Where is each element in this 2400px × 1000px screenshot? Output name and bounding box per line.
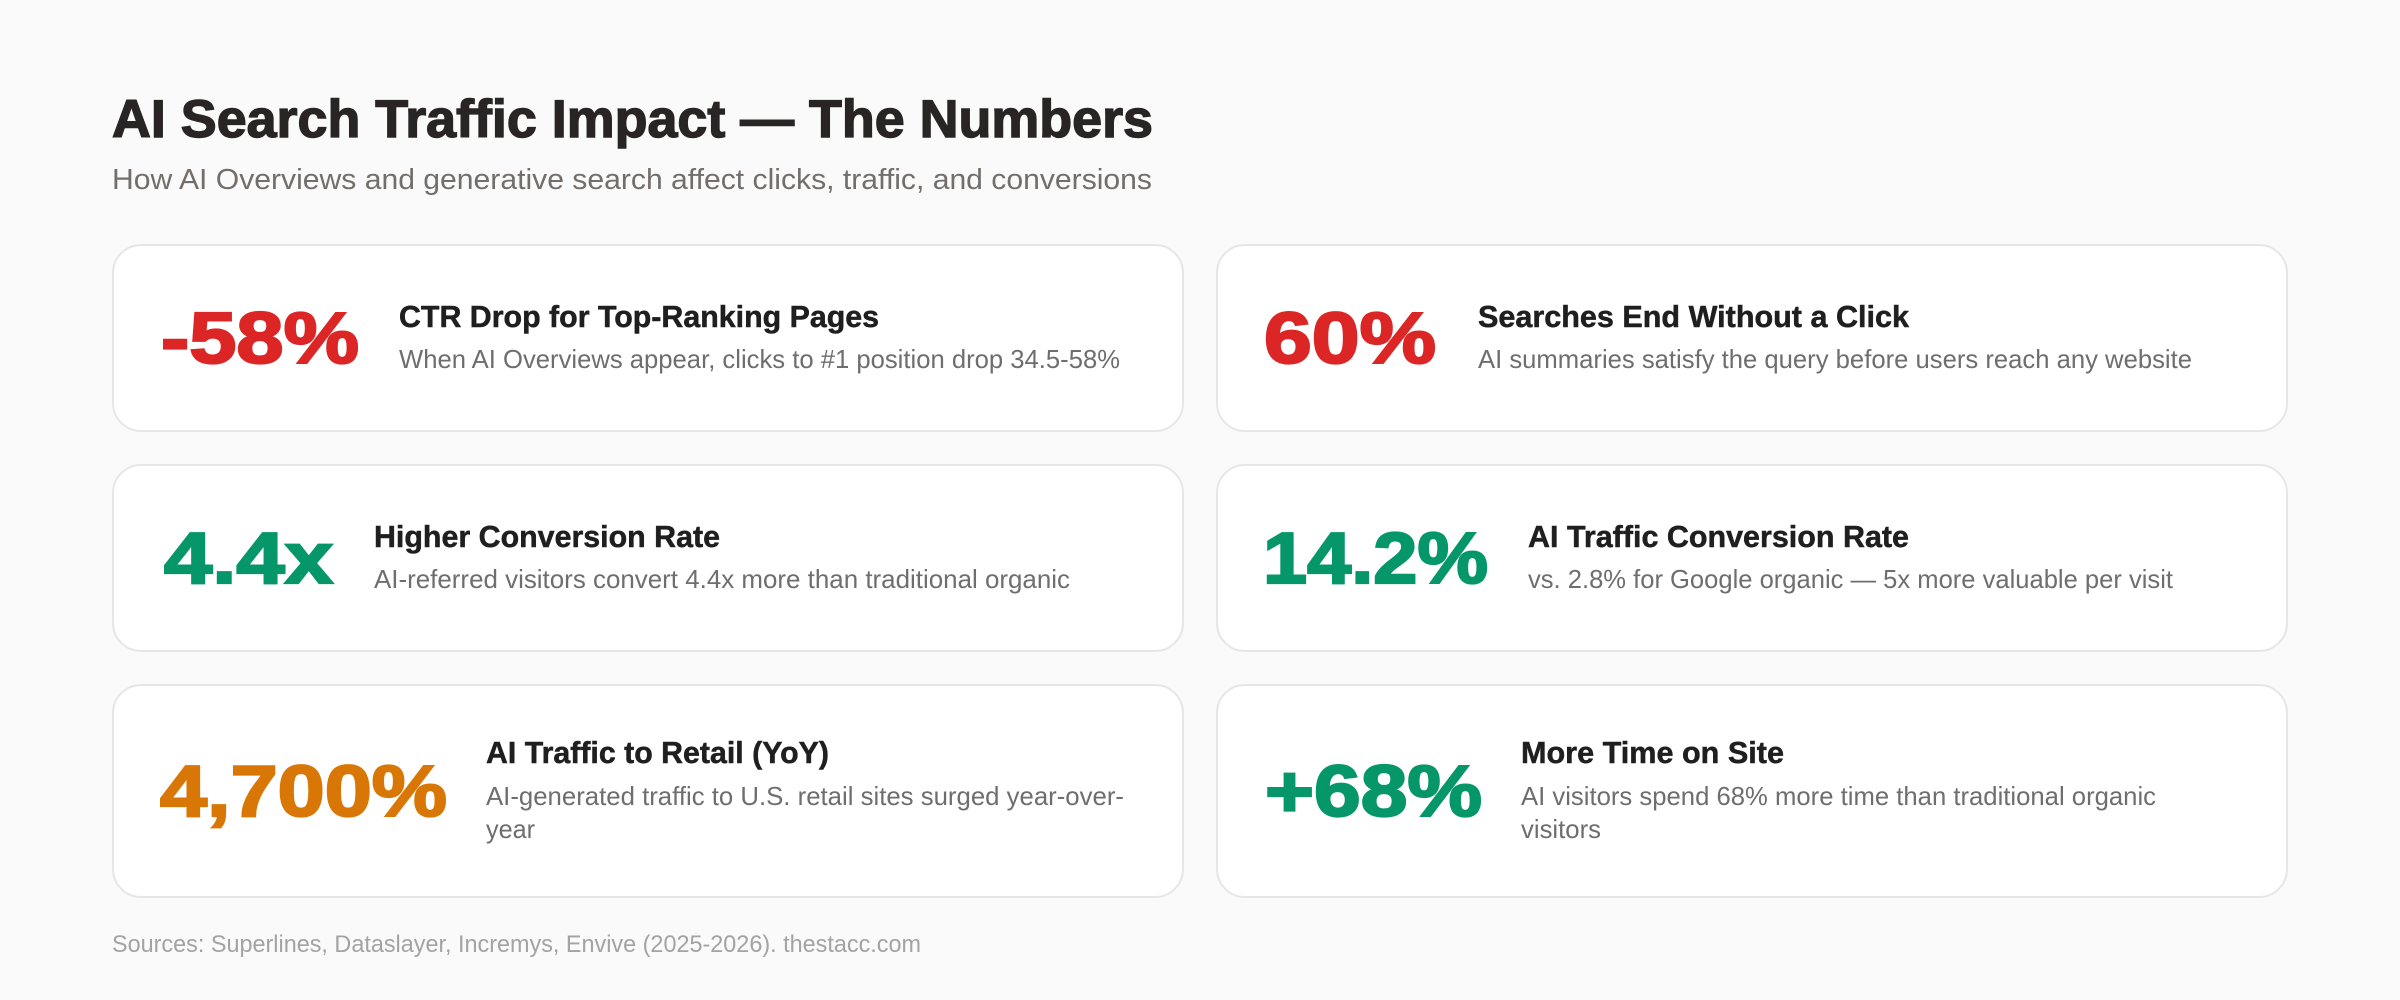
- title: AI Search Traffic Impact — The Numbers: [112, 90, 1153, 149]
- stat: 4,700%: 4,700%: [160, 752, 447, 832]
- stat: +68%: +68%: [1265, 752, 1482, 832]
- panel: AI traffic to retail: [113, 685, 1183, 897]
- card heading: AI Traffic to Retail (YoY): [486, 735, 829, 770]
- card heading: AI Traffic Conversion Rate: [1528, 519, 1909, 554]
- stat: 60%: 60%: [1264, 299, 1436, 379]
- panel: CTR drop: [113, 245, 1183, 431]
- card description: year: [486, 814, 535, 844]
- stat: 4.4x: 4.4x: [164, 519, 333, 599]
- card description: AI-referred visitors convert 4.4x more than traditional organic: [374, 564, 1070, 594]
- card description: vs. 2.8% for Google organic — 5x more valuable per visit: [1528, 564, 2174, 594]
- panel: searches without a click: [1217, 245, 2287, 431]
- card description: [486, 781, 1124, 844]
- card heading: CTR Drop for Top-Ranking Pages: [399, 299, 879, 334]
- stat: 14.2%: 14.2%: [1263, 519, 1488, 599]
- card heading: Higher Conversion Rate: [374, 519, 720, 554]
- card heading: More Time on Site: [1521, 735, 1784, 770]
- card description: AI visitors spend 68% more time than traditional organic: [1521, 781, 2156, 811]
- stat: -58%: -58%: [161, 299, 359, 379]
- panel: higher conversion rate: [113, 465, 1183, 651]
- panel: AI traffic conversion rate: [1217, 465, 2287, 651]
- card description: AI summaries satisfy the query before users reach any website: [1478, 344, 2192, 374]
- card heading: Searches End Without a Click: [1478, 299, 1910, 334]
- card description: When AI Overviews appear, clicks to #1 position drop 34.5-58%: [399, 344, 1120, 374]
- card description: [1521, 781, 2156, 844]
- sources footer: Sources: Superlines, Dataslayer, Incremys, Envive (2025-2026). thestacc.com: [112, 931, 921, 958]
- subtitle: How AI Overviews and generative search affect clicks, traffic, and conversions: [112, 164, 1152, 196]
- panel: more time on site: [1217, 685, 2287, 897]
- card description: visitors: [1521, 814, 1601, 844]
- card description: AI-generated traffic to U.S. retail sites surged year-over-: [486, 781, 1124, 811]
